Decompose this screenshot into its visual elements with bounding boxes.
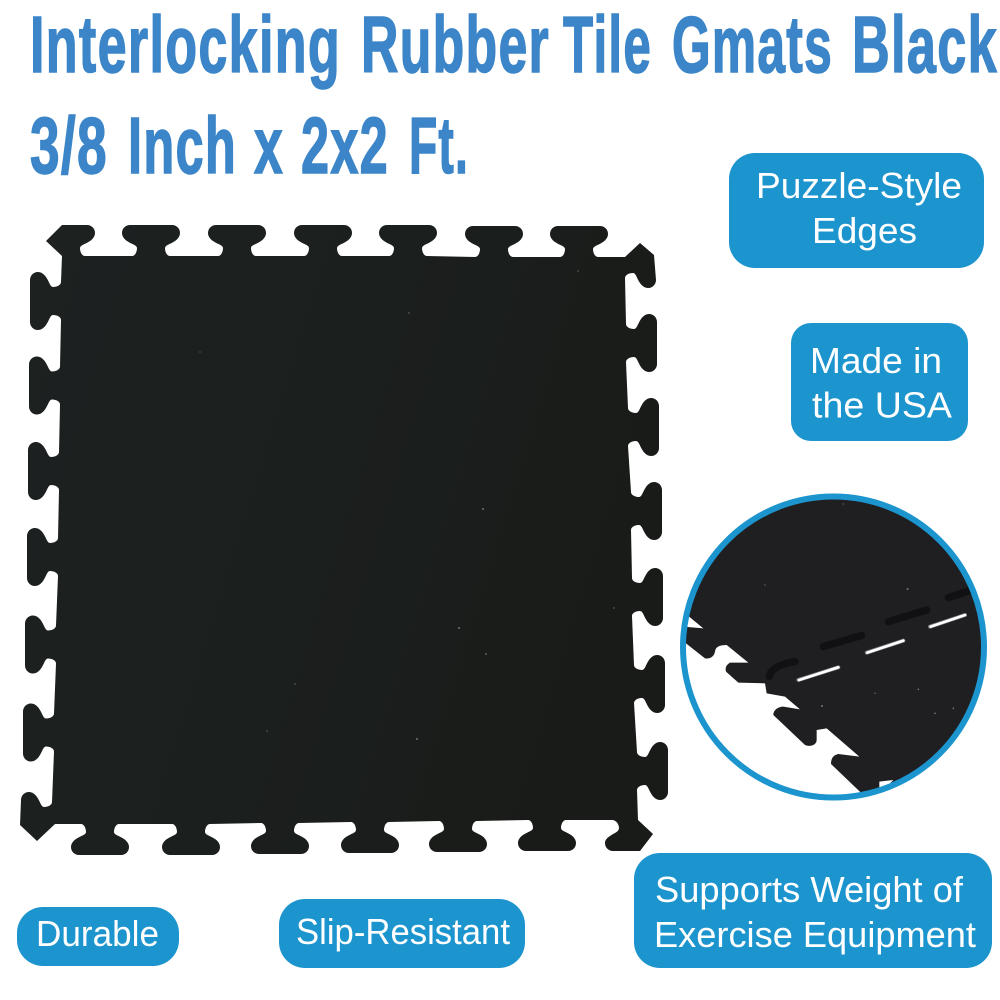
- callout: Supports Weight of Exercise Equipment: Exercise Equipment: [654, 914, 976, 955]
- callout: Durable: Durable: [36, 913, 159, 954]
- callout: Slip-Resistant: [279, 899, 525, 968]
- callout: Made in the USA: [791, 323, 968, 441]
- title: Rubber: [361, 0, 550, 89]
- title: Tile: [563, 0, 652, 89]
- callout: Durable: [17, 907, 179, 966]
- title: Inch: [128, 101, 237, 190]
- callout: Made in the USA: the USA: [812, 384, 952, 426]
- callout: Made in the USA: Made in: [810, 340, 942, 381]
- callout: Supports Weight of Exercise Equipment: [634, 853, 992, 968]
- title: Gmats: [672, 0, 833, 89]
- callout: Puzzle-Style Edges: Edges: [812, 210, 917, 251]
- title: x: [254, 101, 284, 190]
- title: Ft.: [409, 101, 469, 190]
- rubber tile with puzzle edges: [20, 225, 668, 855]
- title: 3/8: [30, 101, 108, 190]
- callout: Puzzle-Style Edges: [729, 153, 984, 268]
- title: Interlocking: [30, 0, 341, 89]
- title: 2x2: [301, 101, 389, 190]
- callout: Slip-Resistant: Slip-Resistant: [296, 911, 510, 952]
- title: [30, 0, 998, 190]
- circular detail photo of interlocked seam: [670, 490, 990, 813]
- callout: Puzzle-Style Edges: Puzzle-Style: [756, 165, 962, 206]
- callout: Supports Weight of Exercise Equipment: Supports Weight of: [655, 869, 964, 910]
